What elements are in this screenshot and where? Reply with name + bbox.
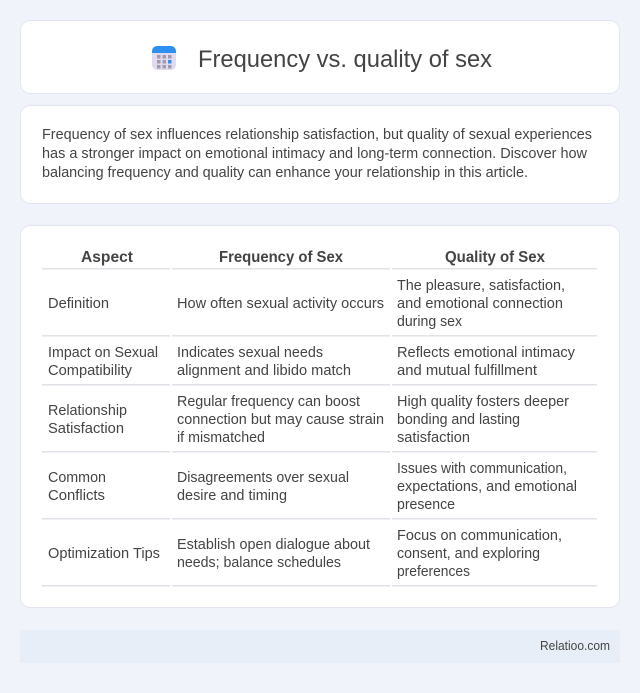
panel: title bbox=[20, 20, 620, 94]
table header row: Aspect bbox=[81, 249, 133, 266]
table header row: Quality of Sex bbox=[445, 249, 545, 266]
heading: Frequency vs. quality of sex bbox=[198, 46, 492, 73]
table row: relationship satisfaction bbox=[48, 394, 569, 446]
table header row bbox=[81, 249, 545, 266]
table row: common conflicts: expectations, and emotional bbox=[397, 479, 577, 495]
table row: common conflicts bbox=[48, 461, 577, 513]
table row: relationship satisfaction: if mismatched bbox=[177, 430, 265, 446]
table row: definition: during sex bbox=[397, 314, 463, 330]
table row: common conflicts: Issues with communication, bbox=[397, 461, 567, 477]
table row: optimization tips: consent, and exploring bbox=[397, 546, 540, 562]
table row: definition: and emotional connection bbox=[397, 296, 563, 312]
table row: impact on sexual compatibility: alignment and libido match bbox=[177, 363, 351, 379]
text block: introduction: has a stronger impact on emotional intimacy and long-term connection. Discover how bbox=[42, 146, 587, 162]
footer bbox=[20, 630, 620, 663]
table row: relationship satisfaction: connection but may cause strain bbox=[177, 412, 384, 428]
table row: definition: The pleasure, satisfaction, bbox=[397, 278, 565, 294]
text block: introduction: balancing frequency and quality can enhance your relationship in this article. bbox=[42, 165, 528, 181]
table row: definition bbox=[48, 278, 565, 330]
table row: impact on sexual compatibility: and mutual fulfillment bbox=[397, 363, 537, 379]
table row: common conflicts: presence bbox=[397, 497, 455, 513]
text block: introduction: Frequency of sex influences relationship satisfaction, but quality of sexual experiences bbox=[42, 127, 592, 143]
table row: optimization tips: Optimization Tips bbox=[48, 546, 160, 562]
table row: relationship satisfaction: Relationship bbox=[48, 403, 127, 419]
table row: common conflicts: desire and timing bbox=[177, 488, 287, 504]
table row: impact on sexual compatibility: Reflects emotional intimacy bbox=[397, 345, 576, 361]
icon: calendar bbox=[152, 46, 176, 70]
panel: introduction bbox=[20, 106, 620, 204]
text block: introduction bbox=[42, 127, 592, 181]
table row: optimization tips: preferences bbox=[397, 564, 470, 580]
table header row: Frequency of Sex bbox=[219, 249, 343, 266]
footer: Relatioo.com bbox=[540, 639, 610, 653]
table row: relationship satisfaction: bonding and lasting bbox=[397, 412, 520, 428]
panel: comparison table bbox=[20, 226, 620, 608]
table row: common conflicts: Common bbox=[48, 470, 106, 486]
table row: common conflicts: Conflicts bbox=[48, 488, 105, 504]
table row: relationship satisfaction: satisfaction bbox=[397, 430, 470, 446]
table row: relationship satisfaction: Satisfaction bbox=[48, 421, 124, 437]
table row: optimization tips: Establish open dialogue about bbox=[177, 537, 370, 553]
table row: optimization tips: needs; balance schedules bbox=[177, 555, 341, 571]
table row: impact on sexual compatibility bbox=[48, 345, 576, 379]
table row: relationship satisfaction: High quality fosters deeper bbox=[397, 394, 569, 410]
table row: definition: Definition bbox=[48, 296, 109, 312]
table row: optimization tips bbox=[48, 528, 562, 580]
table row: impact on sexual compatibility: Indicates sexual needs bbox=[177, 345, 323, 361]
table row: definition: How often sexual activity occurs bbox=[177, 296, 384, 312]
table row: impact on sexual compatibility: Impact on Sexual bbox=[48, 345, 158, 361]
table row: impact on sexual compatibility: Compatibility bbox=[48, 363, 133, 379]
table row: common conflicts: Disagreements over sexual bbox=[177, 470, 349, 486]
table row: relationship satisfaction: Regular frequency can boost bbox=[177, 394, 360, 410]
table row: optimization tips: Focus on communication, bbox=[397, 528, 562, 544]
